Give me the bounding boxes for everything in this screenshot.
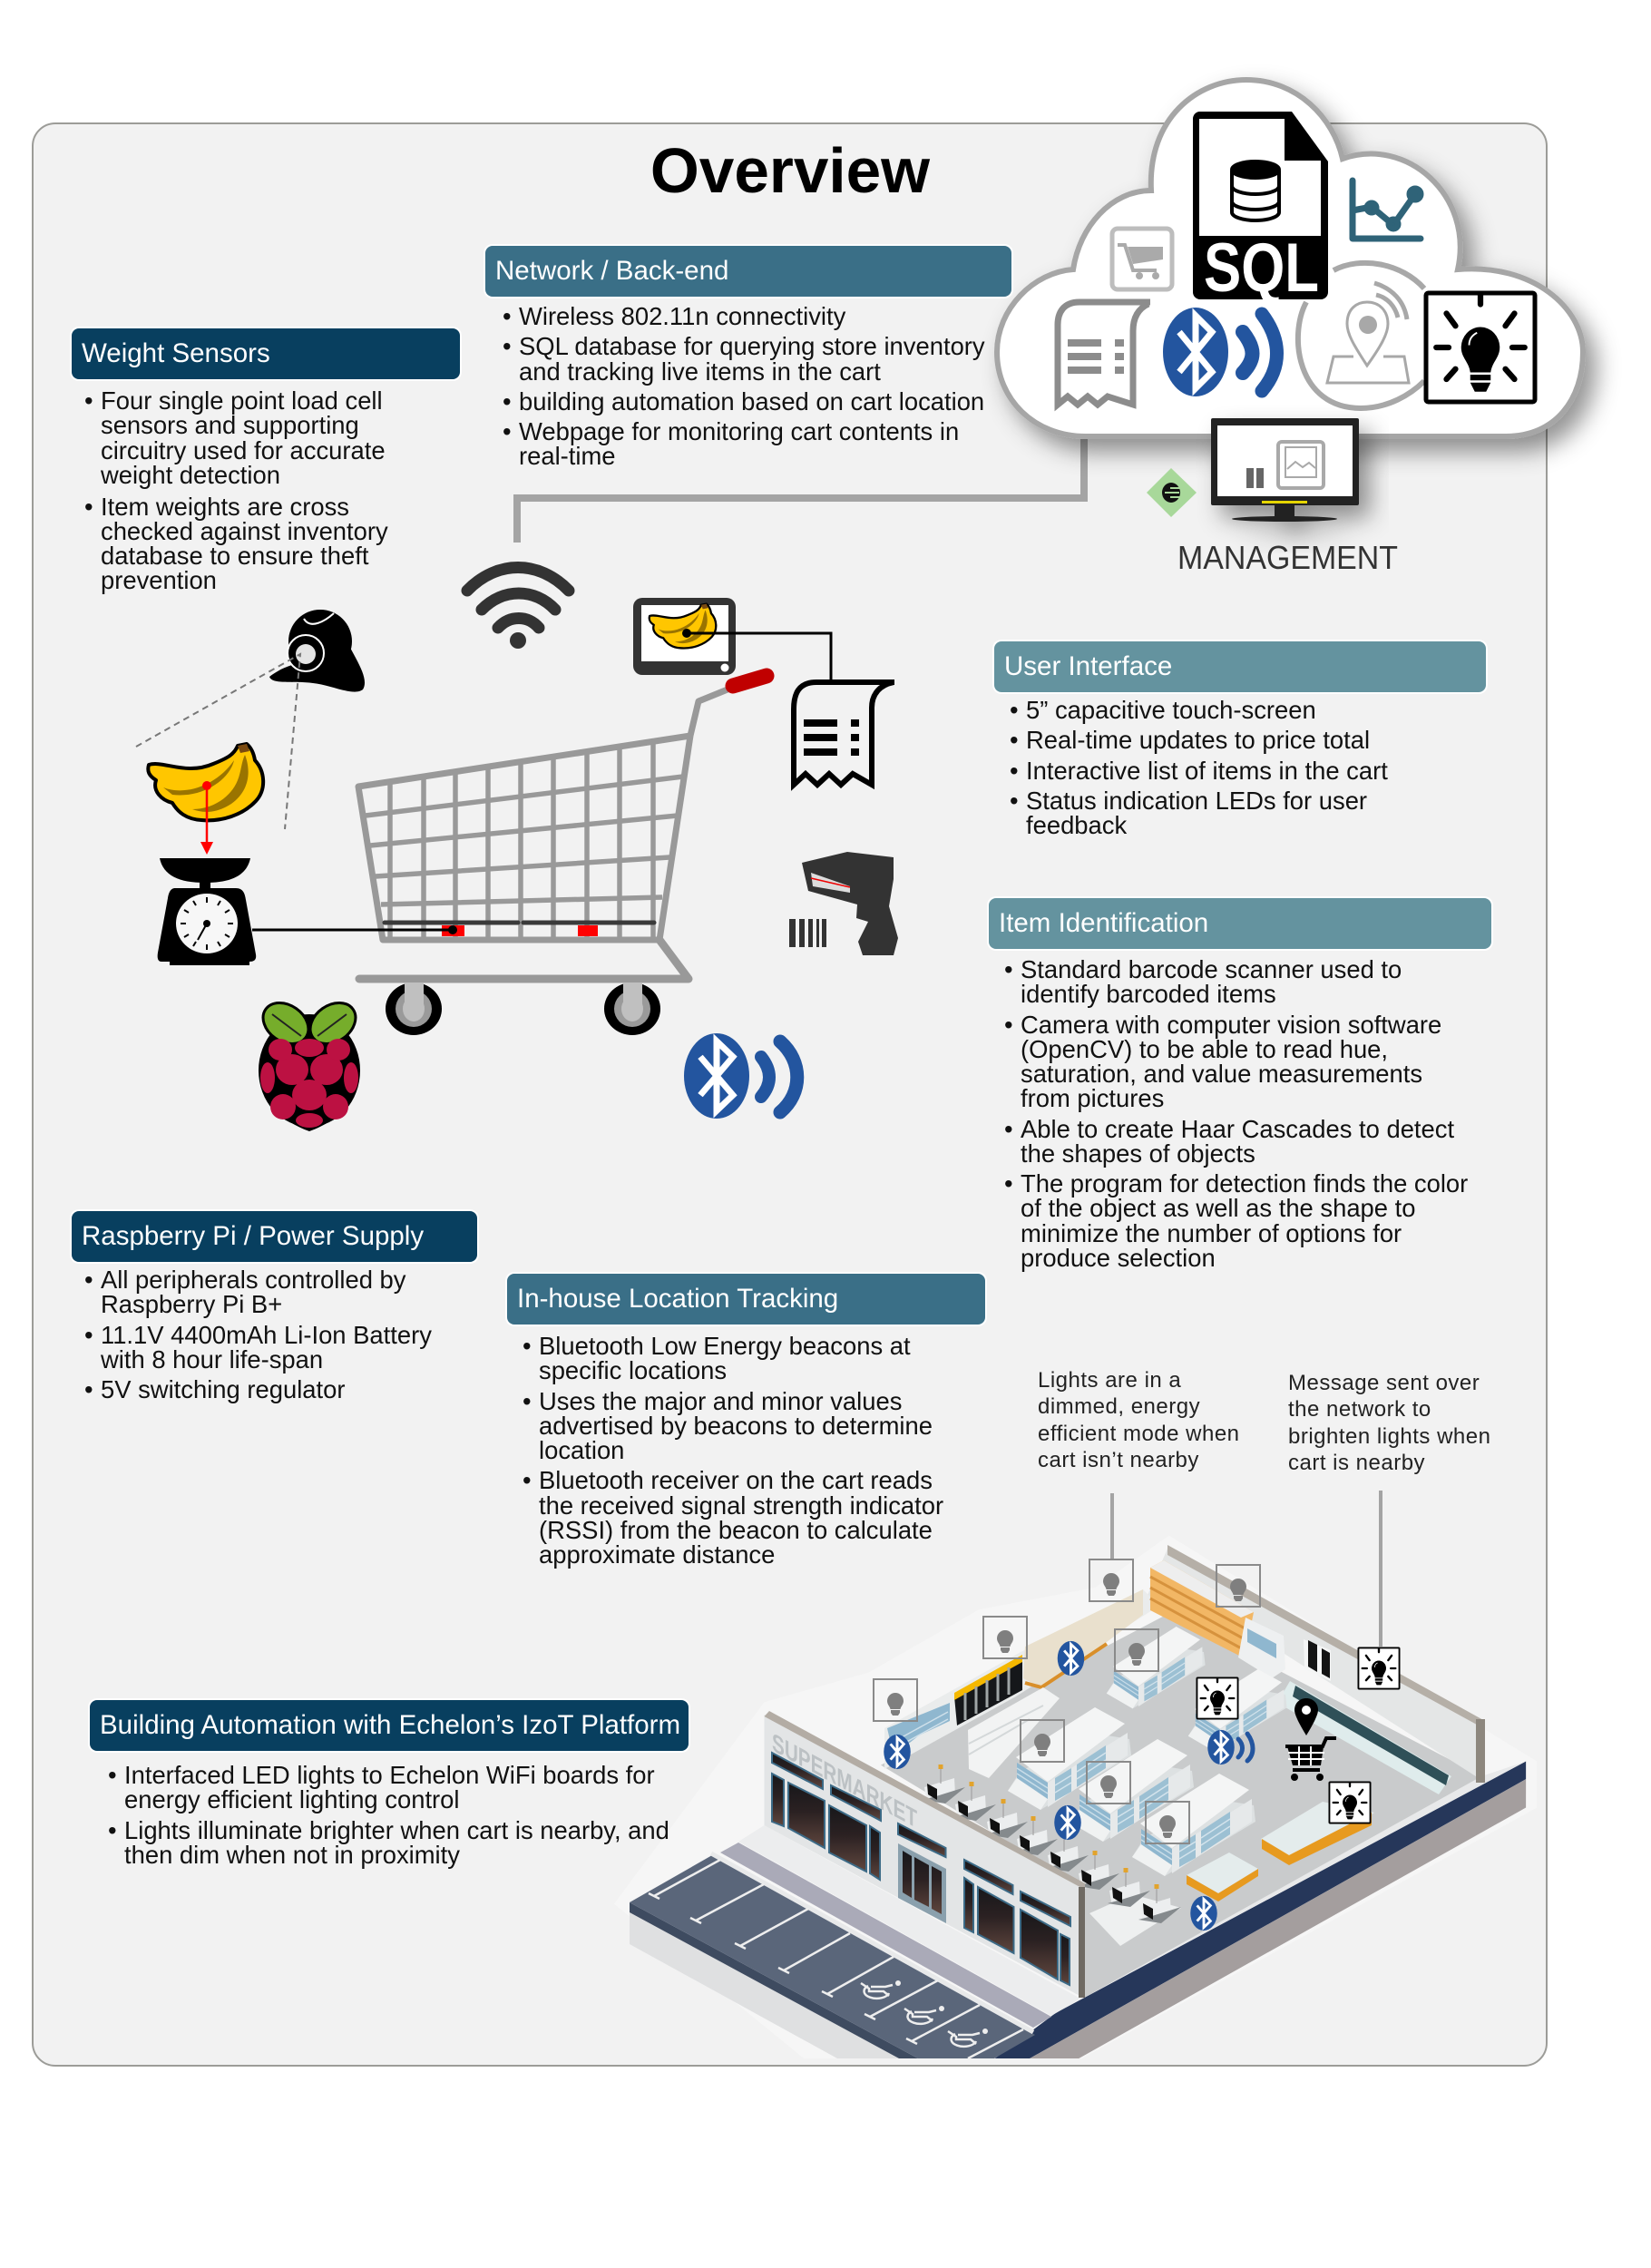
parking lot: [630, 1825, 1080, 2058]
note: lights dimmed: dimmed, energy: [1038, 1394, 1200, 1419]
text: user interface: Interactive list of items in the cart: [1026, 757, 1388, 784]
text: •: [503, 417, 512, 445]
text: building automation: energy efficient lighting control: [124, 1785, 459, 1813]
heading: building automation: [90, 1700, 689, 1751]
storefront facade: [764, 1711, 1085, 1998]
text: •: [1010, 696, 1019, 724]
text: user interface: 5” capacitive touch-screen: [1026, 696, 1316, 724]
text: raspberry pi: 5V switching regulator: [101, 1375, 345, 1403]
text: •: [108, 1761, 117, 1789]
text: item identification: The program for detection finds the color: [1021, 1169, 1468, 1198]
text: weight sensors: [84, 386, 388, 594]
text: •: [523, 1332, 532, 1360]
text: in-house location tracking: Uses the major and minor values: [539, 1386, 902, 1415]
text: item identification: minimize the number of options for: [1021, 1219, 1402, 1246]
heading: network back-end: [485, 246, 1011, 297]
heading: user interface: [994, 641, 1486, 692]
text: in-house location tracking: approximate distance: [539, 1540, 775, 1569]
icon: gray receipt: [1058, 302, 1150, 405]
label: supermarket sign: SUPERMARKET: [772, 1728, 917, 1834]
text: user interface: Status indication LEDs for user: [1026, 787, 1367, 815]
text: weight sensors: checked against inventory: [101, 517, 388, 545]
icon: wifi: [467, 568, 569, 649]
note: lights dimmed: Lights are in a: [1038, 1368, 1181, 1393]
text: weight sensors: prevention: [101, 566, 217, 594]
icon: banana on scale: [148, 744, 263, 820]
heading: weight sensors: [72, 328, 460, 379]
note: lights dimmed: cart isn’t nearby: [1038, 1448, 1199, 1472]
text: item identification: [1004, 955, 1468, 1272]
text: network back-end: Wireless 802.11n connectivity: [519, 302, 845, 330]
text: weight sensors: Item weights are cross: [101, 492, 349, 521]
text: network back-end: SQL database for querying store inventory: [519, 332, 985, 360]
icon: webcam: [269, 610, 365, 692]
heading: network back-end: Network / Back-end: [495, 256, 728, 286]
text: weight sensors: circuitry used for accurate: [101, 435, 386, 464]
text: •: [84, 386, 93, 415]
icon: tablet: [633, 598, 831, 680]
text: network back-end: building automation based on cart location: [519, 387, 984, 415]
icons: bluetooth beacons: [884, 1641, 1253, 1931]
aisle shelf units: [1008, 1627, 1287, 1876]
back walls: [884, 1545, 1485, 1778]
text: building automation: Interfaced LED lights to Echelon WiFi boards for: [124, 1761, 655, 1789]
text: •: [1004, 1011, 1013, 1038]
text: weight sensors: weight detection: [101, 461, 280, 489]
text: item identification: produce selection: [1021, 1244, 1216, 1272]
icon: barcode scanner: [789, 852, 898, 955]
text: in-house location tracking: Bluetooth Low Energy beacons at: [539, 1332, 911, 1360]
leader lines: [1112, 1491, 1381, 1647]
note: lights brighten: the network to: [1288, 1397, 1431, 1422]
text: raspberry pi: [84, 1266, 432, 1403]
text: weight sensors: sensors and supporting: [101, 411, 359, 439]
illustration: supermarket building: [614, 1536, 1537, 2061]
text: raspberry pi: All peripherals controlled by: [101, 1266, 405, 1294]
note: lights brighten: Message sent over: [1288, 1371, 1480, 1395]
text: building automation: Lights illuminate brighter when cart is nearby, and: [124, 1816, 669, 1843]
label: management: MANAGEMENT: [1177, 539, 1398, 576]
note: lights brighten: cart is nearby: [1288, 1451, 1425, 1475]
heading: item identification: [989, 898, 1491, 949]
icon: SQL file: [1193, 112, 1328, 307]
text: •: [84, 1321, 93, 1348]
text: raspberry pi: Raspberry Pi B+: [101, 1290, 282, 1318]
text: item identification: Standard barcode scanner used to: [1021, 955, 1402, 983]
text: network back-end: Webpage for monitoring cart contents in: [519, 417, 959, 445]
heading: weight sensors: Weight Sensors: [82, 338, 270, 368]
text: user interface: feedback: [1026, 811, 1127, 839]
heading: item identification: Item Identification: [999, 908, 1208, 938]
icon: echelon diamond: [1147, 468, 1197, 517]
text: •: [1004, 955, 1013, 983]
text: •: [84, 492, 93, 521]
camera view dashed lines: [136, 654, 300, 829]
checkout counters: [923, 1765, 1181, 1923]
icon: management monitor: [1211, 418, 1359, 522]
text: building automation: [108, 1761, 669, 1869]
icon: raspberry pi: [255, 994, 364, 1131]
note: lights dimmed: [1038, 1368, 1240, 1472]
note: lights dimmed: efficient mode when: [1038, 1422, 1240, 1446]
text: •: [1004, 1169, 1013, 1198]
text: in-house location tracking: (RSSI) from the beacon to calculate: [539, 1516, 933, 1544]
text: •: [84, 1266, 93, 1294]
text: •: [503, 332, 512, 360]
icon: line chart: [1353, 181, 1421, 239]
text: •: [1010, 726, 1019, 754]
cloud: [997, 80, 1583, 436]
icon: database: [1232, 161, 1279, 220]
text: •: [503, 302, 512, 330]
text: item identification: Camera with computer vision software: [1021, 1011, 1441, 1038]
text: network back-end: and tracking live items in the cart: [519, 357, 881, 385]
icon: lightbulb: [1426, 293, 1535, 402]
display cases: [1089, 1802, 1374, 1946]
text: network back-end: [503, 302, 985, 470]
text: •: [523, 1386, 532, 1415]
text: •: [1004, 1114, 1013, 1143]
heading: building automation: Building Automation with Echelon’s IzoT Platform: [100, 1710, 680, 1740]
text: weight sensors: database to ensure theft: [101, 542, 368, 570]
note: lights brighten: [1288, 1371, 1490, 1475]
text: in-house location tracking: location: [539, 1436, 624, 1464]
heading: raspberry pi: [72, 1211, 477, 1262]
text: raspberry pi: with 8 hour life-span: [101, 1345, 323, 1374]
title: Overview: [650, 135, 930, 206]
icon: cart box: [1112, 229, 1172, 289]
text: •: [503, 387, 512, 415]
arrow: banana to scale: [200, 781, 213, 855]
text: in-house location tracking: the received signal strength indicator: [539, 1491, 943, 1519]
text: item identification: saturation, and value measurements: [1021, 1060, 1422, 1088]
text: •: [108, 1816, 117, 1843]
icons: bright light bulbs: [1197, 1647, 1400, 1823]
text: item identification: from pictures: [1021, 1084, 1164, 1112]
text: raspberry pi: 11.1V 4400mAh Li-Ion Battery: [101, 1321, 432, 1348]
text: in-house location tracking: Bluetooth receiver on the cart reads: [539, 1466, 933, 1494]
cart wheels: [386, 982, 660, 1035]
text: user interface: [1010, 696, 1388, 839]
text: item identification: (OpenCV) to be able to read hue,: [1021, 1035, 1388, 1063]
text: user interface: Real-time updates to price total: [1026, 726, 1370, 754]
heading: in-house location tracking: [507, 1274, 985, 1325]
text: weight sensors: Four single point load cell: [101, 386, 383, 415]
icon: SQL file: SQL: [1204, 230, 1319, 307]
text: item identification: identify barcoded items: [1021, 980, 1276, 1008]
note: lights brighten: brighten lights when: [1288, 1424, 1490, 1449]
text: •: [1010, 757, 1019, 784]
text: item identification: of the object as well as the shape to: [1021, 1194, 1415, 1222]
text: •: [84, 1375, 93, 1403]
text: item identification: Able to create Haar Cascades to detect: [1021, 1114, 1454, 1143]
text: in-house location tracking: advertised by beacons to determine: [539, 1412, 933, 1440]
text: •: [1010, 787, 1019, 815]
icon: location pin in ring: [1298, 263, 1424, 408]
connector: cloud to wifi: [517, 439, 1084, 543]
text: •: [523, 1466, 532, 1494]
icon: bluetooth beacon cloud: [1163, 308, 1277, 396]
heading: raspberry pi: Raspberry Pi / Power Supply: [82, 1221, 424, 1251]
icons: dimmed light bulbs: [874, 1559, 1260, 1843]
illustration layer: [136, 74, 1612, 2058]
text: item identification: the shapes of objects: [1021, 1139, 1255, 1168]
text: network back-end: real-time: [519, 442, 616, 470]
icon: shopping cart: [358, 676, 767, 1035]
panel: overview card: [32, 122, 1548, 2067]
heading: in-house location tracking: In-house Location Tracking: [517, 1284, 838, 1314]
icon: kitchen scale: [158, 858, 457, 965]
text: building automation: then dim when not in proximity: [124, 1841, 460, 1869]
icon: bluetooth beacon: [684, 1033, 797, 1119]
back shelving: [887, 1560, 1451, 1794]
icon: receipt: [794, 682, 894, 785]
icon: cart pin: [1285, 1698, 1336, 1781]
text: in-house location tracking: specific locations: [539, 1356, 727, 1384]
text: in-house location tracking: [523, 1332, 943, 1569]
heading: user interface: User Interface: [1004, 651, 1172, 681]
